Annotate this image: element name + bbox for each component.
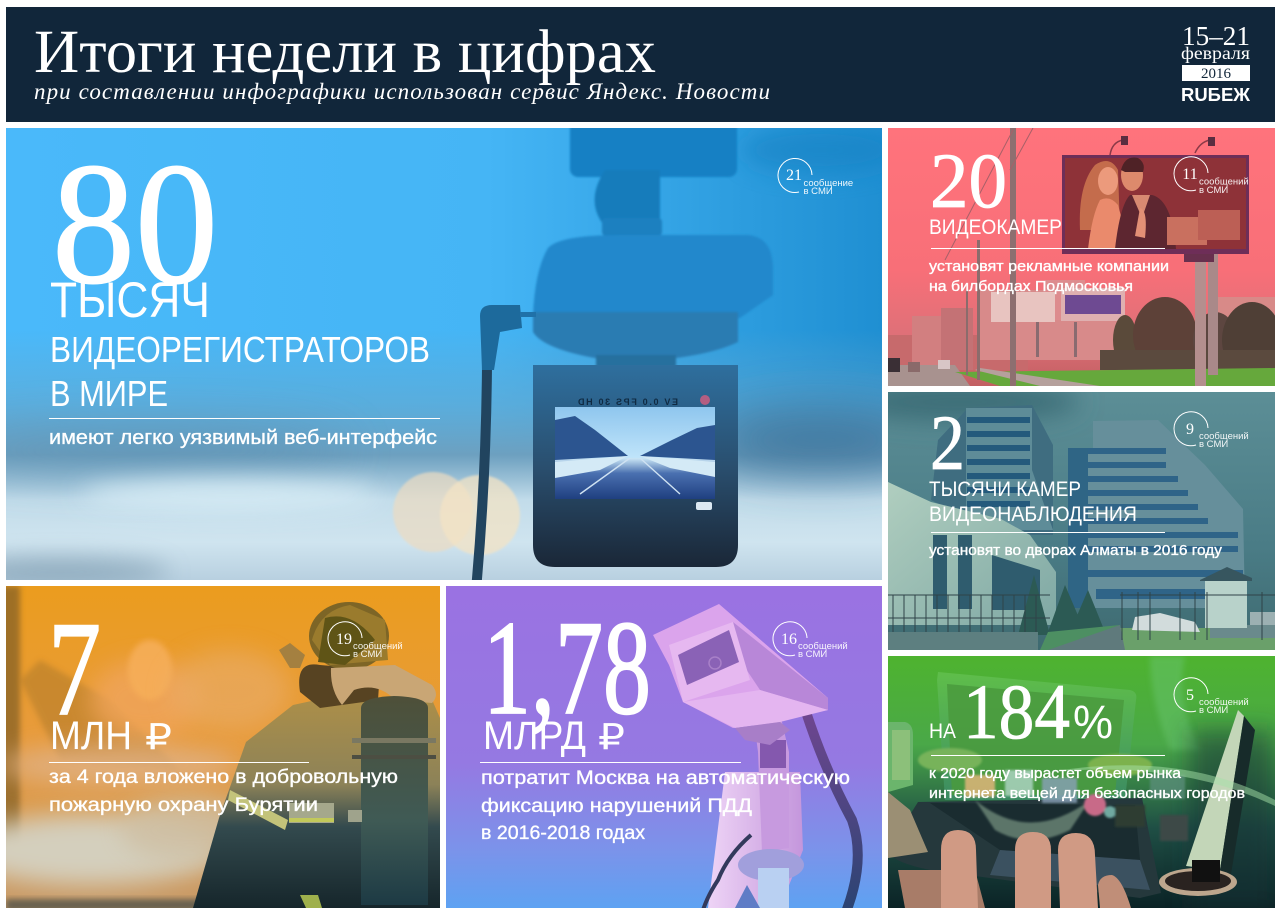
icon cloud xyxy=(918,748,1188,841)
description: фиксацию нарушений ПДД xyxy=(481,796,752,817)
description xyxy=(49,767,398,816)
right terraced building xyxy=(1068,420,1245,608)
media count badge: 19 xyxy=(336,631,352,648)
media count badge: в СМИ xyxy=(1199,705,1228,716)
ground and wall xyxy=(888,625,1275,650)
unit heading: В МИРЕ xyxy=(50,373,168,414)
description: имеют легко уязвимый веб-интерфейс xyxy=(49,427,437,449)
media count badge: в СМИ xyxy=(804,186,833,197)
power cable xyxy=(476,305,536,590)
unit heading: ₽ xyxy=(145,717,172,758)
media count badge xyxy=(328,622,403,660)
media count badge: сообщений xyxy=(1199,176,1249,188)
unit heading: ВИДЕОНАБЛЮДЕНИЯ xyxy=(929,503,1137,526)
mount box xyxy=(708,772,803,908)
media count badge: сообщений xyxy=(1199,431,1249,442)
media count badge: сообщений xyxy=(798,641,848,652)
dash camera device: EV 0.0 FPS 30 HD xyxy=(578,397,678,407)
unit heading: ₽ xyxy=(598,717,625,758)
big number 1,78: 1,78 xyxy=(483,594,651,743)
small word НА: НА xyxy=(929,720,956,743)
hand xyxy=(898,830,1131,908)
description: потратит Москва на автоматическую xyxy=(481,768,850,789)
media count badge: в СМИ xyxy=(353,649,382,660)
title: Итоги недели в цифрах xyxy=(34,19,656,86)
guard booth xyxy=(1200,567,1252,628)
media count badge: в СМИ xyxy=(798,649,827,660)
description xyxy=(929,766,1245,802)
date block: 15–21 xyxy=(1182,21,1250,51)
panel: dashcams xyxy=(0,120,930,590)
cars xyxy=(1132,612,1275,632)
unit heading: ВИДЕОРЕГИСТРАТОРОВ xyxy=(50,329,430,370)
left cable xyxy=(703,835,751,910)
big number 184 percent: 184 xyxy=(963,668,1070,755)
media count badge xyxy=(778,158,853,197)
media count badge xyxy=(1174,678,1249,716)
media count badge: сообщение xyxy=(804,178,853,189)
device corner xyxy=(888,792,928,858)
panel: internet of things xyxy=(888,656,1275,908)
left tower xyxy=(931,405,1053,535)
unit heading: МЛРД xyxy=(483,714,586,758)
trees xyxy=(1018,575,1105,635)
big number 80: 80 xyxy=(52,127,218,320)
unit heading: ТЫСЯЧ xyxy=(50,272,210,328)
media count badge: 21 xyxy=(786,167,802,184)
description: установят рекламные компании xyxy=(929,259,1169,275)
panel: fire brigade xyxy=(0,586,440,911)
air tank xyxy=(352,696,436,905)
mounting flange xyxy=(735,849,804,910)
media count badge: 11 xyxy=(1182,166,1198,183)
description: в 2016-2018 годах xyxy=(481,823,645,844)
media count badge xyxy=(773,622,848,660)
arm xyxy=(752,705,789,852)
trees xyxy=(1100,297,1275,370)
description: на билбордах Подмосковья xyxy=(929,279,1133,295)
reflective stripes xyxy=(228,790,362,908)
monitor xyxy=(1159,710,1255,896)
big number 7: 7 xyxy=(48,595,101,744)
description: пожарную охрану Бурятии xyxy=(49,795,318,816)
unit heading xyxy=(51,282,428,406)
media count badge: сообщений xyxy=(1199,697,1249,708)
unit heading: ТЫСЯЧИ КАМЕР xyxy=(929,478,1081,501)
laptop keyboard xyxy=(888,798,1161,898)
bokeh lights xyxy=(393,472,520,555)
main billboard xyxy=(1062,136,1249,386)
date block: февраля xyxy=(1181,43,1250,63)
big number 20: 20 xyxy=(930,137,1007,224)
background billboards xyxy=(991,288,1125,357)
date block xyxy=(1181,21,1251,105)
camera display xyxy=(555,407,715,499)
description xyxy=(481,768,850,844)
dash camera device xyxy=(476,120,773,590)
green ribbon xyxy=(1050,765,1275,806)
unit heading xyxy=(929,478,1137,526)
iron fence xyxy=(888,592,1275,640)
description xyxy=(928,262,1168,294)
big number 184 percent: % xyxy=(1073,695,1113,748)
subtitle: при составлении инфографики использован сервис Яндекс. Новости xyxy=(34,79,770,104)
panel: CCTV in Almaty xyxy=(888,392,1275,650)
fire and smoke xyxy=(0,586,290,911)
housing xyxy=(653,604,828,745)
header banner xyxy=(6,7,1275,122)
description: установят во дворах Алматы в 2016 году xyxy=(929,543,1223,559)
firefighter xyxy=(193,602,440,908)
date block: 2016 xyxy=(1201,66,1232,82)
media count badge: 9 xyxy=(1186,421,1194,438)
media count badge: 5 xyxy=(1186,687,1194,704)
description: за 4 года вложено в добровольную xyxy=(49,767,398,788)
media count badge xyxy=(1174,157,1249,196)
low pale building xyxy=(888,482,1056,625)
breathing hood xyxy=(331,665,436,705)
media count badge xyxy=(1174,412,1249,450)
unit heading: МЛН xyxy=(50,714,132,758)
helmet xyxy=(279,602,389,670)
description: интернета вещей для безопасных городов xyxy=(929,786,1245,802)
big number 2: 2 xyxy=(930,399,965,486)
media count badge: в СМИ xyxy=(1199,439,1228,450)
description: к 2020 году вырастет объем рынка xyxy=(929,766,1182,782)
poles xyxy=(945,128,1033,386)
right cable xyxy=(806,712,858,912)
road and grass xyxy=(888,358,1275,386)
laptop screen xyxy=(937,672,1136,800)
media count badge: сообщений xyxy=(353,641,403,652)
unit heading: ВИДЕОКАМЕР xyxy=(929,216,1062,239)
media count badge: 16 xyxy=(781,631,797,648)
media count badge: в СМИ xyxy=(1199,185,1228,196)
panel: traffic cameras xyxy=(446,586,882,912)
tablet xyxy=(888,722,913,792)
security camera xyxy=(653,604,858,912)
date block: RUБЕЖ xyxy=(1181,85,1251,105)
background buildings xyxy=(888,280,1275,371)
panel: billboards xyxy=(888,128,1280,386)
